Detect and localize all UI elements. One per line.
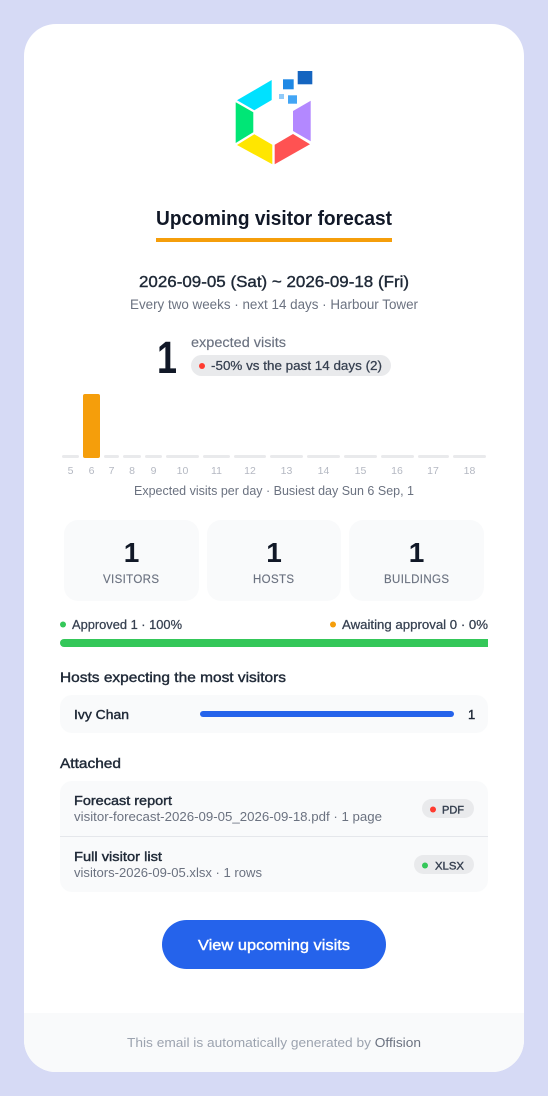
attachment: full visitor list: visitors-2026-09-05.xlsx · 1 rows [74, 866, 262, 880]
logo [236, 71, 312, 164]
bar chart: expected visits per day: 11 [211, 465, 222, 477]
bar chart: expected visits per day: 8 [129, 465, 135, 477]
headline metric: 1 [157, 332, 177, 383]
title [156, 207, 392, 242]
stat card: visitors: 1 [124, 537, 139, 568]
bar chart: expected visits per day: 15 [355, 465, 366, 477]
hosts heading: Hosts expecting the most visitors [60, 669, 286, 685]
button: view upcoming visits [162, 920, 386, 969]
bar chart: expected visits per day: 10 [177, 465, 188, 477]
host row: Ivy Chan: 1 [468, 707, 475, 722]
bar chart: expected visits per day: 18 [464, 465, 475, 477]
bar chart: expected visits per day: 6 [89, 465, 95, 477]
headline metric [157, 332, 391, 383]
approval legend [60, 618, 488, 632]
stat card: buildings [349, 520, 484, 601]
stat card: buildings: 1 [409, 537, 424, 568]
headline metric: -50% vs the past 14 days (2) [211, 358, 382, 373]
bar chart: expected visits per day: 17 [427, 465, 439, 477]
approval legend: Approved 1 · 100% [72, 618, 182, 632]
footer: This email is automatically generated by Offision [127, 1035, 421, 1050]
host row: Ivy Chan: Ivy Chan [74, 707, 129, 722]
stat card: visitors [64, 520, 199, 601]
bar chart: expected visits per day: 13 [281, 465, 292, 477]
attachment: full visitor list: XLSX [435, 860, 465, 872]
button: view upcoming visits: View upcoming visits [198, 937, 350, 954]
stat card: hosts [207, 520, 341, 601]
chart caption: Expected visits per day · Busiest day Sun 6 Sep, 1 [134, 484, 414, 498]
bar chart: expected visits per day: 9 [151, 465, 157, 477]
schedule subtitle: Every two weeks · next 14 days · Harbour Tower [130, 297, 418, 312]
stat card: hosts: HOSTS [253, 574, 294, 586]
stat card: buildings: BUILDINGS [384, 574, 449, 586]
attachment: forecast report: visitor-forecast-2026-09-05_2026-09-18.pdf · 1 page [74, 810, 382, 824]
bar chart: expected visits per day: 12 [244, 465, 256, 477]
approval legend: Awaiting approval 0 · 0% [342, 618, 488, 632]
stat card: visitors: VISITORS [103, 574, 159, 586]
bar chart: expected visits per day: 5 [68, 465, 74, 477]
attachment: full visitor list [74, 849, 474, 880]
host row: Ivy Chan [60, 695, 488, 733]
attachment: full visitor list: Full visitor list [74, 849, 162, 864]
attachment: forecast report: Forecast report [74, 793, 172, 808]
attachment: forecast report [74, 793, 474, 824]
title: Upcoming visitor forecast [156, 207, 392, 230]
attached heading: Attached [60, 755, 121, 771]
headline metric: expected visits [191, 335, 286, 350]
bar chart: expected visits per day [62, 394, 486, 477]
attachments panel [60, 781, 488, 892]
date range: 2026-09-05 (Sat) ~ 2026-09-18 (Fri) [139, 274, 409, 291]
bar chart: expected visits per day: 14 [318, 465, 329, 477]
stat card: hosts: 1 [266, 537, 282, 568]
bar chart: expected visits per day: 7 [109, 465, 115, 477]
attachment: forecast report: PDF [442, 804, 464, 816]
approval progress bar [60, 639, 488, 647]
bar chart: expected visits per day: 16 [391, 465, 403, 477]
